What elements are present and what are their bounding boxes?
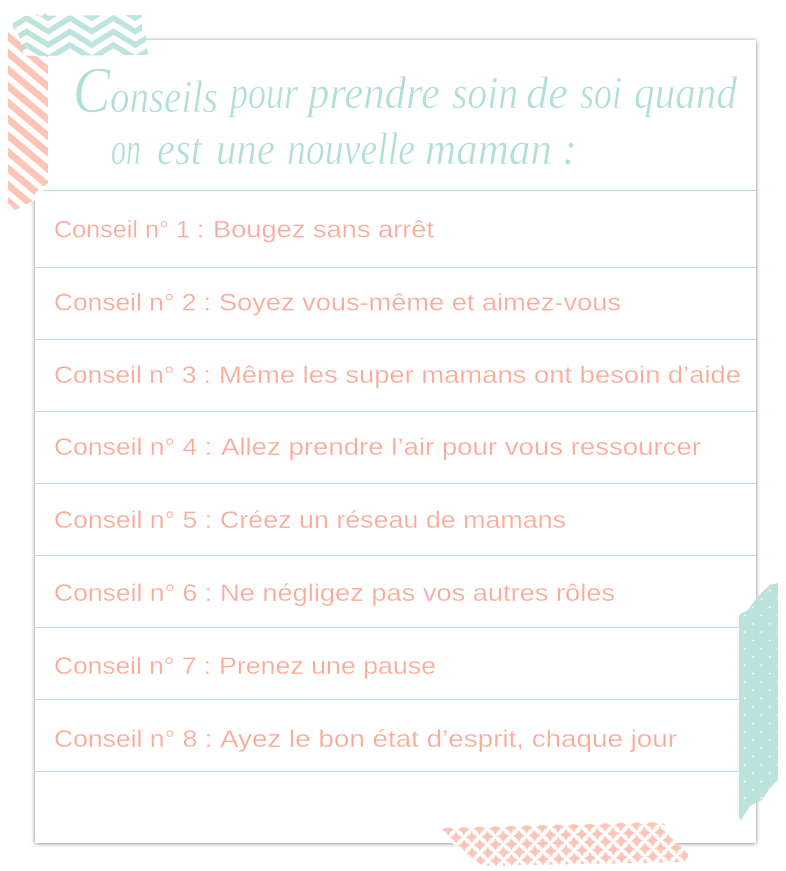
tip 2: Soyez vous-même et aimez-vous — [219, 290, 621, 316]
title line 1: soi — [580, 67, 622, 118]
title line 1 — [73, 54, 738, 127]
tip 1: Conseil n° 1 : — [54, 216, 204, 244]
tip 2: Conseil n° 2 : — [54, 290, 211, 316]
title line 1: pour — [228, 67, 299, 118]
washi tape: mint chevrons — [13, 15, 149, 56]
title line 2: est — [157, 123, 203, 174]
tip 6: Conseil n° 6 : — [54, 580, 212, 607]
title line 1: de — [526, 67, 568, 118]
title line 2: on — [111, 123, 141, 174]
title line 1: prendre — [305, 67, 440, 118]
title — [73, 54, 738, 174]
tip 3: Même les super mamans ont besoin d’aide — [219, 362, 741, 389]
title line 2: une — [216, 123, 275, 174]
title line 2: maman — [425, 123, 552, 174]
tip 7: Prenez une pause — [219, 653, 436, 680]
tip 5: Créez un réseau de mamans — [220, 507, 566, 534]
title line 2: nouvelle — [287, 123, 415, 174]
title line 1: soin — [452, 67, 518, 118]
washi tape: coral diamonds — [438, 822, 688, 866]
tip 5: Conseil n° 5 : — [54, 507, 212, 534]
washi tape: coral stripes — [8, 7, 48, 210]
list of tips — [54, 216, 741, 753]
tip 8: Ayez le bon état d’esprit, chaque jour — [220, 726, 677, 753]
title line 1: quand — [634, 67, 738, 118]
tip 4: Allez prendre l’air pour vous ressourcer — [221, 434, 701, 461]
tip 7: Conseil n° 7 : — [54, 653, 211, 680]
tip 4: Conseil n° 4 : — [54, 434, 212, 461]
title line 2 — [111, 123, 577, 174]
tip 6: Ne négligez pas vos autres rôles — [220, 580, 615, 607]
title line 2: : — [562, 123, 577, 174]
title line 1: Conseils — [73, 54, 218, 127]
tip 8: Conseil n° 8 : — [54, 726, 212, 753]
tip 3: Conseil n° 3 : — [54, 362, 211, 389]
tip 1: Bougez sans arrêt — [213, 216, 434, 244]
washi tape: mint dots — [739, 583, 778, 820]
